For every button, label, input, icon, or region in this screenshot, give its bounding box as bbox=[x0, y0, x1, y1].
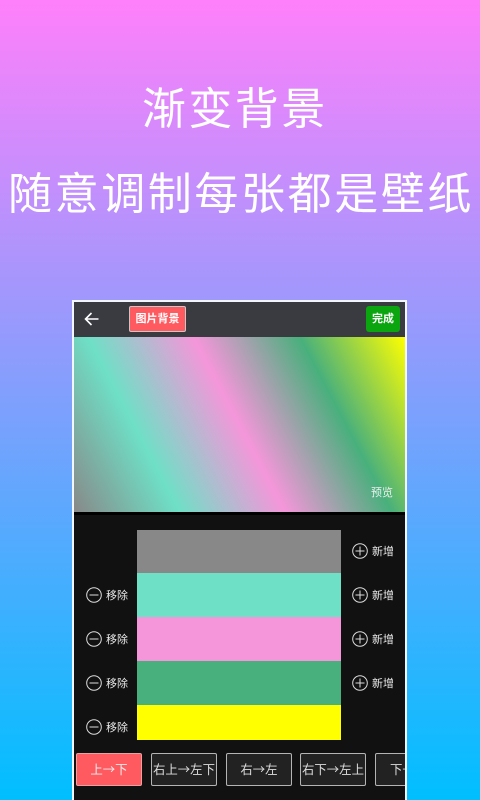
gradient preview bbox=[73, 337, 406, 512]
remove control 3 bbox=[86, 675, 128, 691]
add control 4: 新增 bbox=[372, 678, 394, 690]
remove control 1 bbox=[86, 587, 128, 603]
done button: 完成 bbox=[372, 313, 394, 325]
gray stop bbox=[137, 530, 341, 573]
direction button: top to bottom, active bbox=[76, 753, 142, 786]
title line 1: 渐变背景 bbox=[142, 73, 328, 137]
pink stop bbox=[137, 617, 341, 661]
color stop stack bbox=[137, 530, 341, 740]
add control 1 bbox=[352, 543, 394, 559]
direction button: top right to bottom left: 右上→左下 bbox=[153, 760, 215, 778]
direction button: bottom right to top left bbox=[300, 753, 366, 786]
direction button: bottom right to top left: 右下→左上 bbox=[302, 760, 364, 778]
add control 3: 新增 bbox=[372, 634, 394, 646]
add control 1: 新增 bbox=[372, 546, 394, 558]
preview label: 预览 bbox=[371, 487, 393, 499]
green stop bbox=[137, 661, 341, 705]
direction button: top right to bottom left bbox=[151, 753, 217, 786]
remove control 4 bbox=[86, 719, 128, 735]
remove control 2: 移除 bbox=[106, 634, 128, 646]
remove control 3: 移除 bbox=[106, 678, 128, 690]
done button bbox=[366, 306, 400, 332]
icon: back arrow bbox=[84, 312, 98, 326]
direction button: top to bottom, active: 上→下 bbox=[90, 760, 128, 778]
image background button: 图片背景 bbox=[136, 313, 180, 325]
remove control 1: 移除 bbox=[106, 590, 128, 602]
add control 2: 新增 bbox=[372, 590, 394, 602]
phone screenshot panel bbox=[72, 300, 407, 800]
direction button: right to left: 右→左 bbox=[240, 760, 278, 778]
teal stop bbox=[137, 573, 341, 617]
direction button: right to left bbox=[226, 753, 292, 786]
add control 2 bbox=[352, 587, 394, 603]
remove control 2 bbox=[86, 631, 128, 647]
add control 4 bbox=[352, 675, 394, 691]
remove control 4: 移除 bbox=[106, 722, 128, 734]
toolbar bbox=[74, 302, 405, 337]
yellow stop bbox=[137, 705, 341, 740]
image background button bbox=[129, 306, 186, 332]
title line 2: 随意调制每张都是壁纸 bbox=[8, 158, 474, 222]
add control 3 bbox=[352, 631, 394, 647]
direction button: bottom to top, clipped bbox=[375, 753, 441, 786]
black strip under preview bbox=[74, 512, 405, 515]
